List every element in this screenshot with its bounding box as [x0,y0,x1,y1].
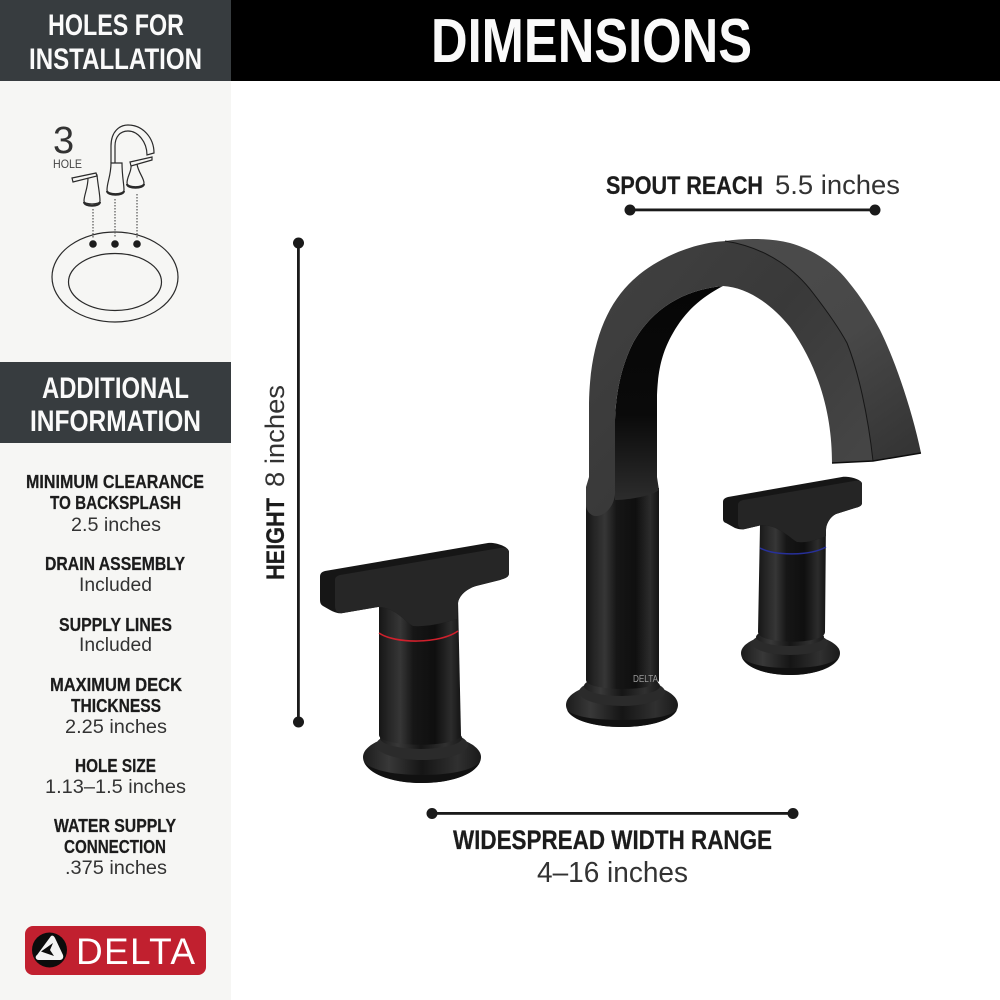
text block: water supply connection: .375 inches [65,858,167,879]
handle: left lever front face [335,548,509,626]
text block: drain assembly [45,553,186,596]
icon: sink holes [89,240,141,248]
header: holes for installation [0,0,231,81]
text block: maximum deck thickness: 2.25 inches [65,717,167,738]
icon: three hole faucet and sink diagram [52,120,178,322]
stem: left handle [379,600,461,745]
text block: hole size [45,755,186,798]
text block: water supply connection [54,815,177,879]
header: holes for installation: HOLES FOR [48,9,184,42]
text block: drain assembly: Included [79,575,152,596]
text block: supply lines: Included [79,635,152,656]
base: center [566,676,678,727]
base: right handle [741,628,840,675]
text block: water supply connection: WATER SUPPLY [54,815,177,836]
illustration: faucet spout and body [566,239,921,727]
spout: back inner band [615,286,723,500]
icon: sink outline [52,232,178,322]
header: holes for installation: INSTALLATION [29,43,202,76]
logo: delta [25,926,206,975]
text block: water supply connection: CONNECTION [64,836,166,857]
text: spout reach [606,170,900,200]
text: height: 8 inches [260,385,290,487]
logo: delta: DELTA [76,931,195,972]
arrow: height dimension line [293,238,304,728]
text block: minimum clearance: 2.5 inches [71,515,161,536]
arrow: width dimension line [426,808,798,819]
accent: red hot indicator [379,631,458,641]
text block: drain assembly: DRAIN ASSEMBLY [45,553,186,574]
handle: right lever [723,477,862,542]
text: widespread width range: WIDESPREAD WIDTH RANGE [453,825,772,855]
base: left handle [363,727,481,783]
text: spout reach: SPOUT REACH [606,172,763,200]
text block: hole size: HOLE SIZE [75,755,156,776]
spout: outer top face [725,239,921,461]
text: height [260,385,290,580]
stem: right handle [758,520,826,642]
text: widespread width range: 4–16 inches [537,857,688,889]
text: spout reach: 5.5 inches [775,170,900,200]
illustration: left handle [320,543,509,783]
body: center column [586,488,659,689]
text: widespread width range [453,825,772,889]
header: additional information: INFORMATION [30,405,201,438]
spout: tip edge [832,453,921,463]
text block: supply lines: SUPPLY LINES [59,614,172,635]
handle: left lever [320,543,509,626]
text block: maximum deck thickness: THICKNESS [71,695,161,716]
arrow: spout reach dimension line [624,204,880,216]
title: dimensions: DIMENSIONS [431,7,752,76]
spout: ridge line [725,241,873,461]
header: additional information [0,362,231,443]
icon: dotted guide lines [93,194,137,238]
title: dimensions [231,0,1000,81]
illustration: right handle [723,477,862,675]
accent: blue cold indicator [760,547,826,554]
label: 3 hole [53,120,82,171]
text block: supply lines [59,614,172,656]
label: 3 hole: HOLE [53,157,82,171]
text block: maximum deck thickness [50,674,183,738]
text block: hole size: 1.13–1.5 inches [45,777,186,798]
handle: right lever front face [738,481,862,542]
text block: minimum clearance [26,471,204,536]
text: height: HEIGHT [262,498,290,580]
text: delta engraving: DELTA [633,674,658,685]
spout: front face [586,241,873,516]
panel: left sidebar background [0,0,231,1000]
text block: minimum clearance: TO BACKSPLASH [50,492,181,513]
text block: maximum deck thickness: MAXIMUM DECK [50,674,183,695]
header: additional information: ADDITIONAL [42,372,189,405]
icon: small faucet [72,125,154,206]
label: 3 hole: 3 [53,120,74,162]
text block: minimum clearance: MINIMUM CLEARANCE [26,471,204,492]
